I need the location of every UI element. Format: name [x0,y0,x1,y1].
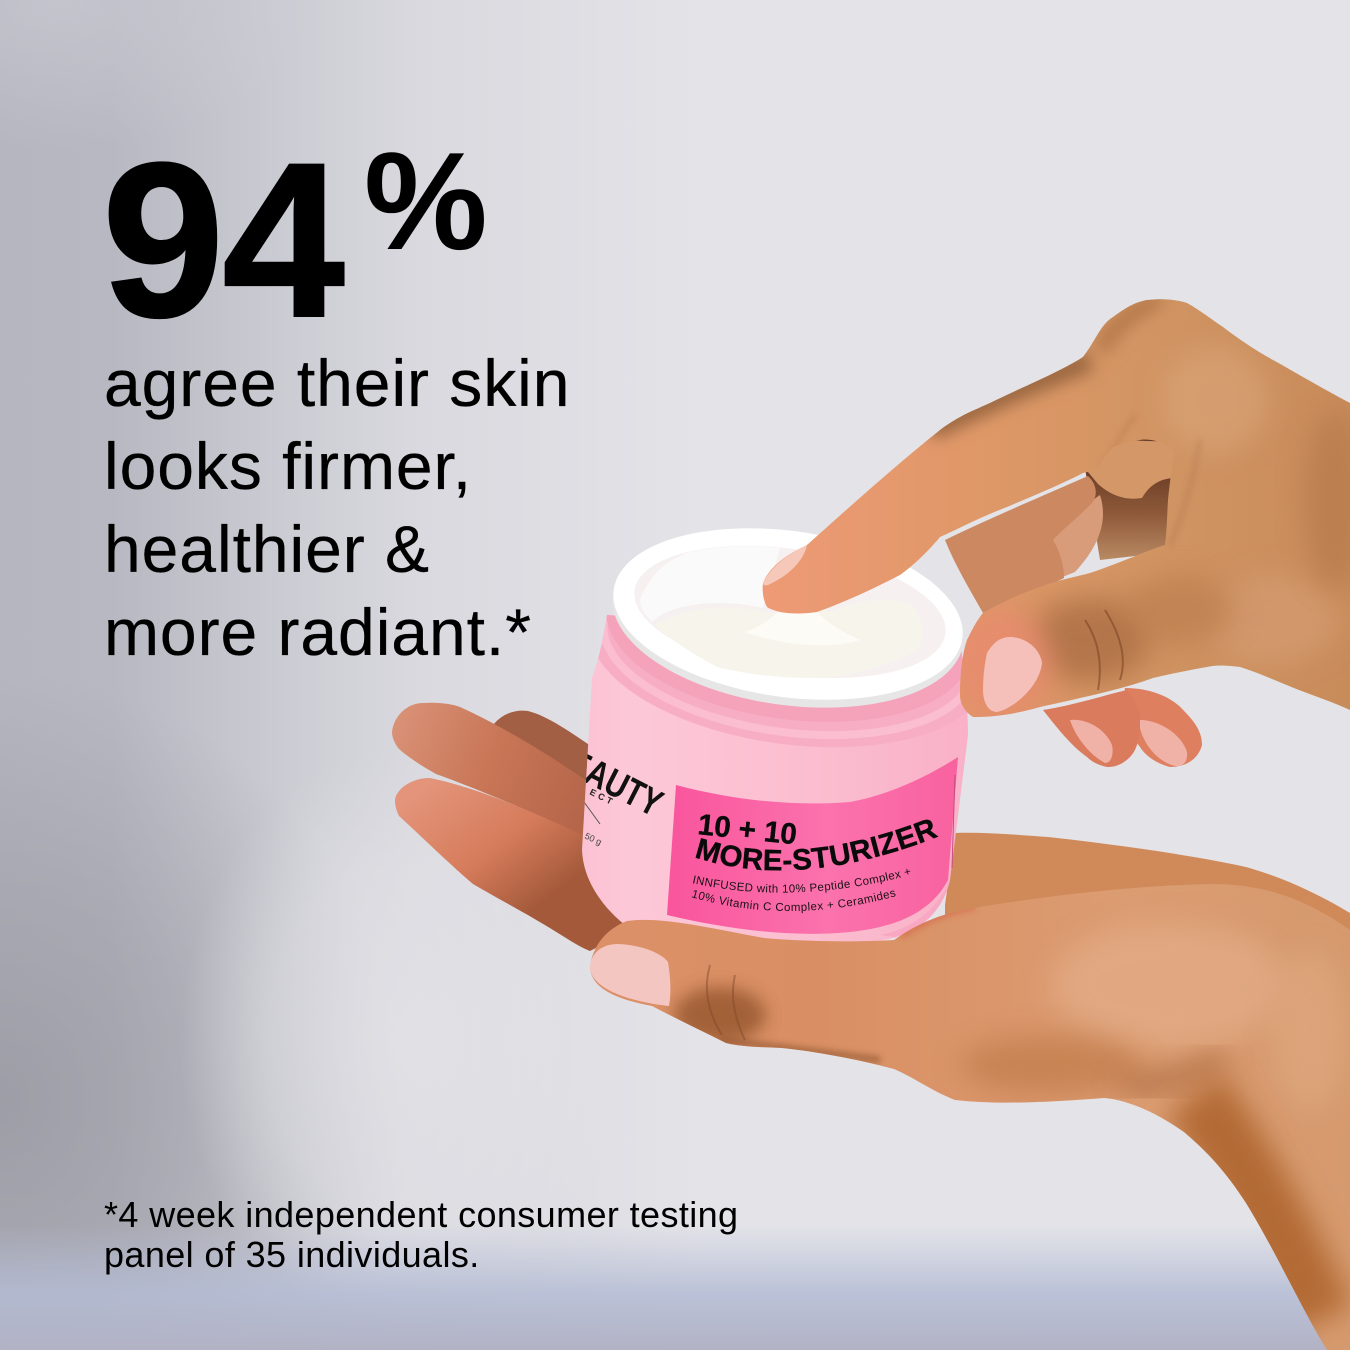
headline text: agree their skin [104,346,570,420]
headline text: healthier & [104,512,430,586]
label title: MORE-STURIZER: MORE-STURIZER [696,820,938,871]
inner hand shadow [1085,436,1180,560]
lower hand palm and thumb [580,880,1350,1350]
cream [626,528,954,696]
pink label [667,757,958,934]
short finger [491,711,600,800]
percent sign: % [364,124,488,279]
big number 94: 94 [102,117,343,363]
brand text on jar: ECT [588,787,617,808]
ring finger [1050,495,1103,578]
nail: thumb [983,637,1042,712]
nail: outer finger [1140,720,1187,766]
knuckle fold [1088,440,1180,499]
middle finger [945,476,1096,613]
label title: 10 + 10: 10 + 10 [696,808,798,851]
upper finger [392,703,600,845]
upper hand [750,290,1350,767]
footnote: *4 week independent consumer testing [104,1194,738,1235]
brand text on jar [584,754,666,846]
footnote: panel of 35 individuals. [104,1234,480,1275]
nail: lower thumb [590,944,670,1006]
label description [692,868,910,914]
footnote [104,1194,738,1275]
jar rim [601,507,975,729]
brand text on jar: 50 g [583,831,603,847]
palm behind jar [945,833,1350,980]
hand back, index finger and thumb [750,290,1350,730]
nail: index finger [763,545,807,585]
lower hand fingers behind jar [392,703,640,951]
label description: INNFUSED with 10% Peptide Complex + [693,868,910,893]
lower curled fingers [1043,688,1202,767]
brand text on jar: EAUTY [561,743,669,825]
lower finger [395,778,640,951]
headline text: looks firmer, [104,429,472,503]
jar body [582,615,968,942]
headline text [104,346,570,669]
label description: 10% Vitamin C Complex + Ceramides [692,890,896,914]
jar [582,528,968,942]
headline text: more radiant.* [104,595,532,669]
nail: lower finger [1070,720,1113,763]
